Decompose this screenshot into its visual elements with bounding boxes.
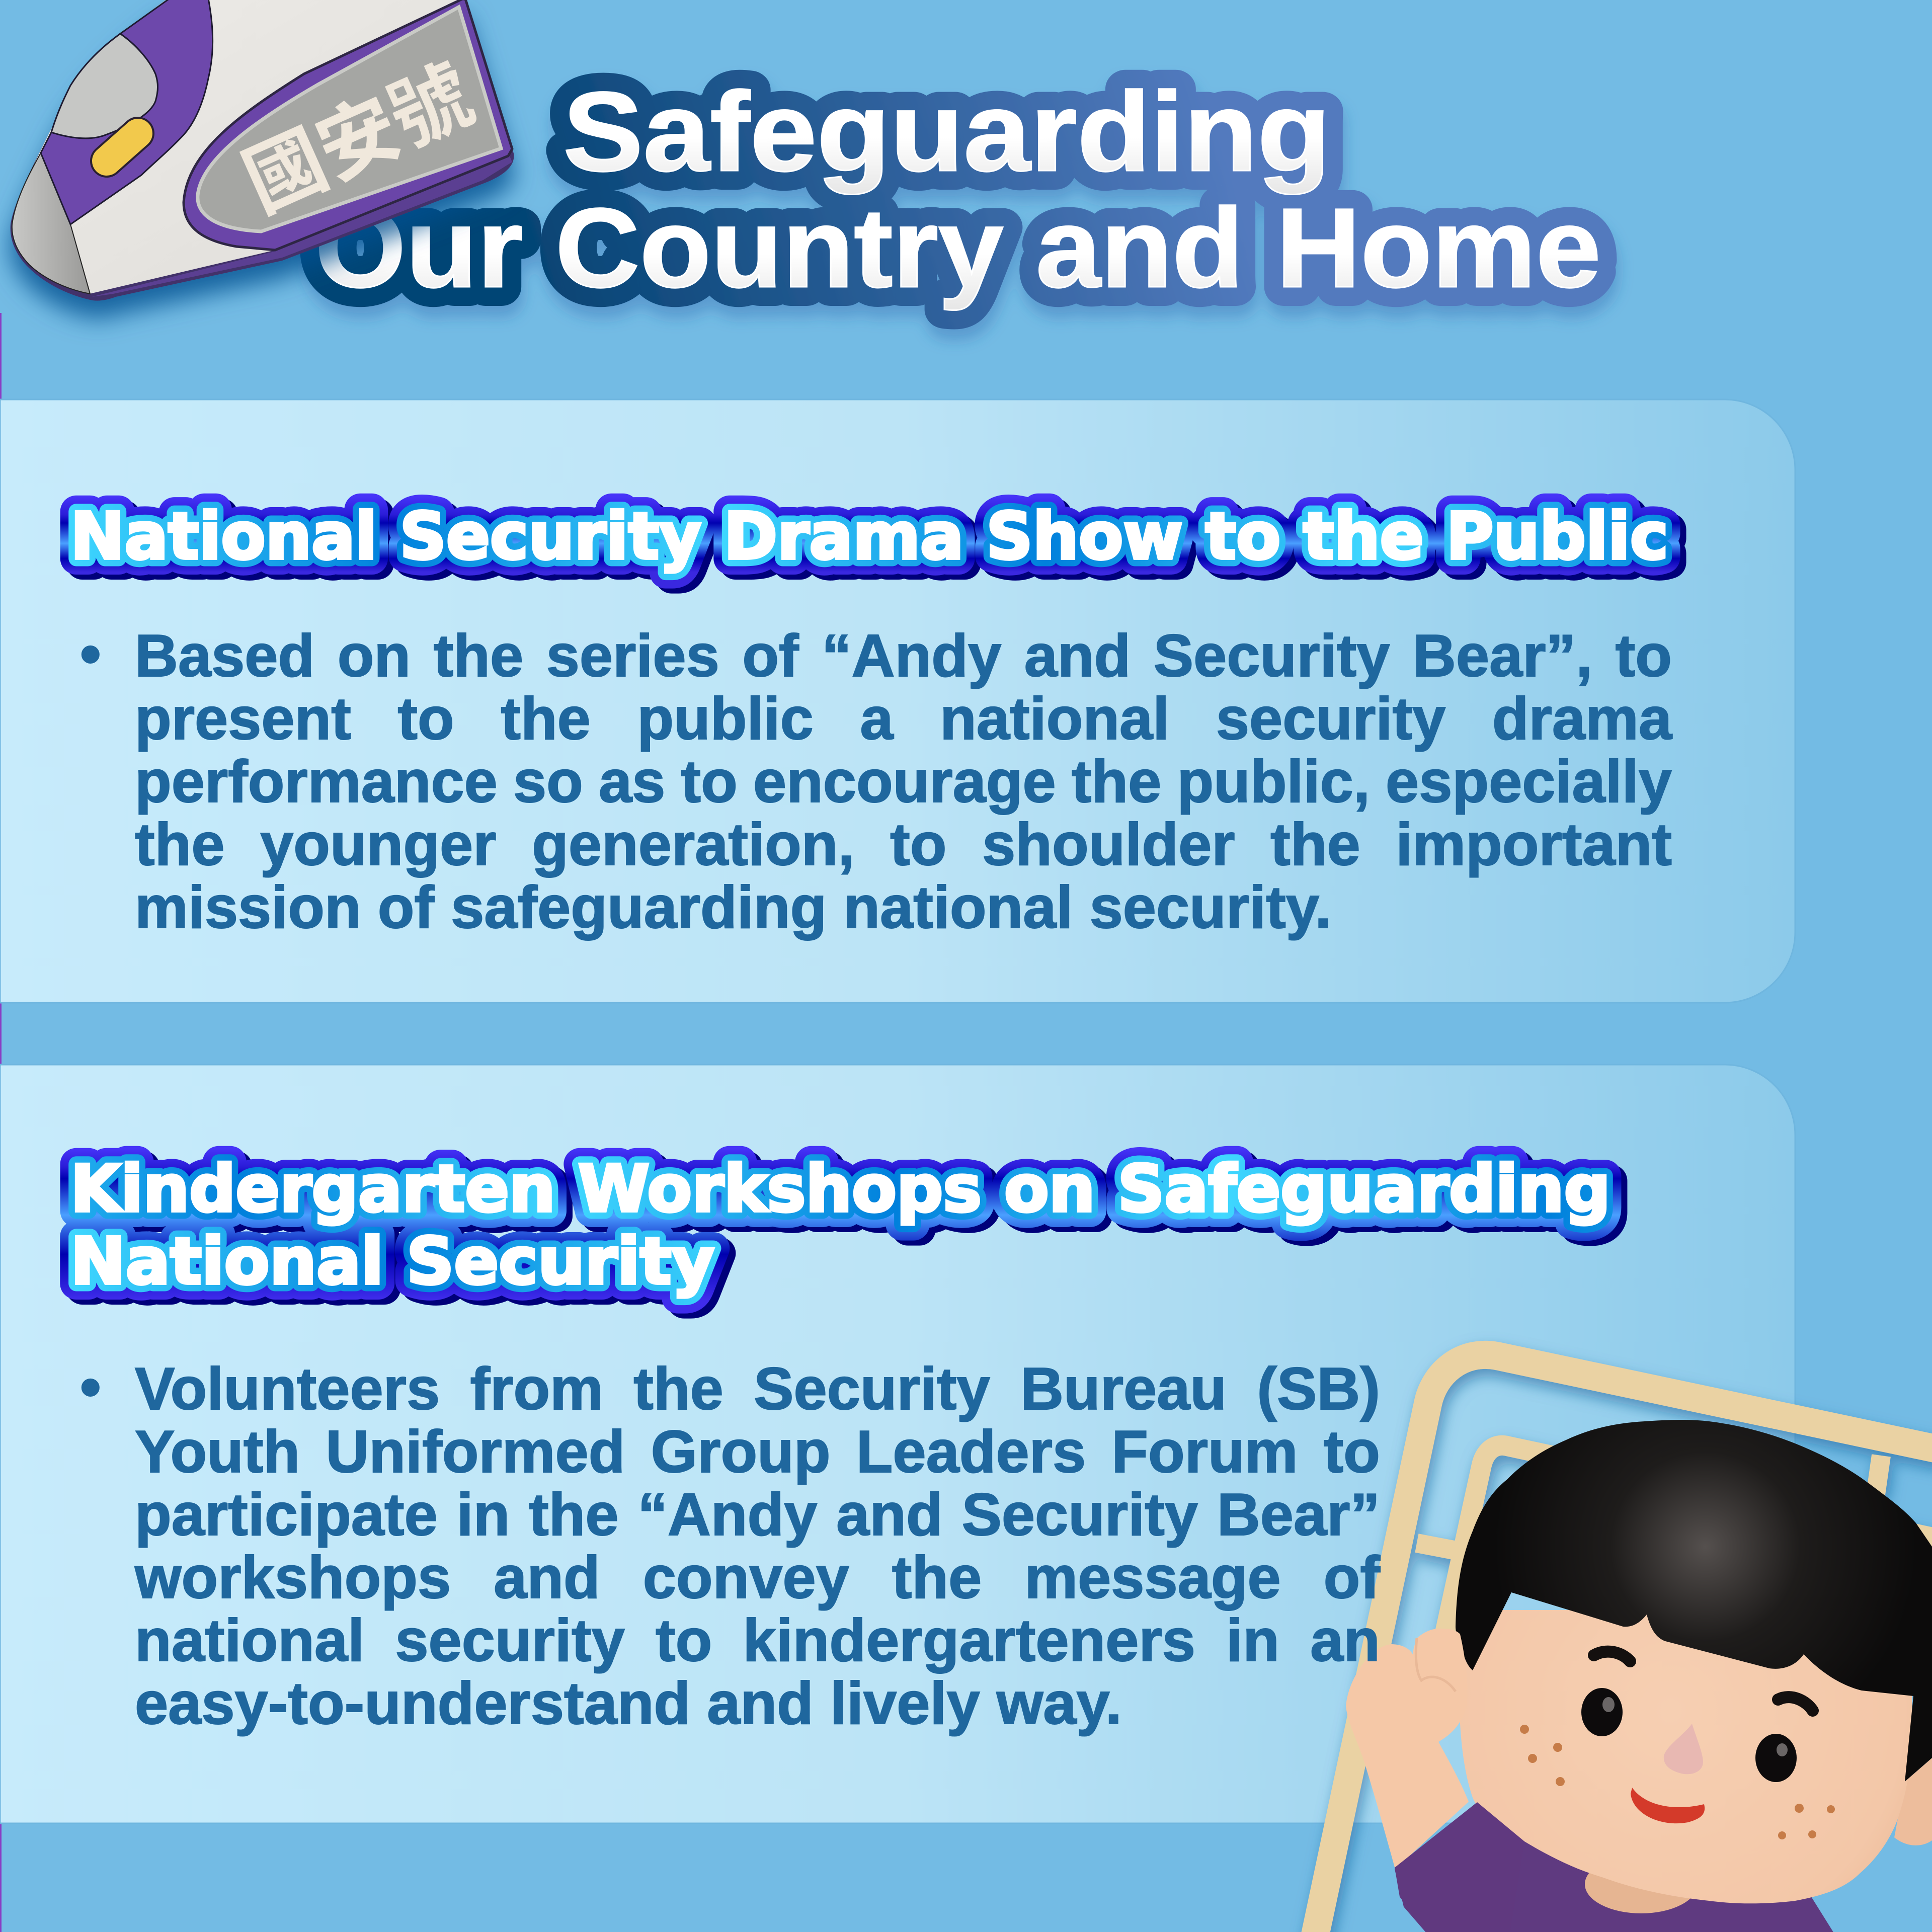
text block: kindergarten workshops description: Youth Uniformed Group Leaders Forum to: [135, 1418, 1380, 1485]
text block: drama show description: present to the public a national security drama: [135, 685, 1672, 752]
heading: National Security Drama Show to the Public: National Security Drama Show to the Public: [70, 499, 1668, 574]
heading: Kindergarten Workshops on Safeguarding National Security: National Security: [70, 1224, 714, 1299]
heading: Kindergarten Workshops on Safeguarding National Security: Kindergarten Workshops on Safeguarding: [70, 1152, 1611, 1227]
heading: Kindergarten Workshops on Safeguarding National Security: [70, 1152, 1617, 1304]
heading: Kindergarten Workshops on Safeguarding National Security: National Security: [70, 1224, 714, 1299]
title: Our Country and Home: [315, 185, 1601, 311]
heading: Kindergarten Workshops on Safeguarding National Security: National Security: [70, 1224, 714, 1299]
right eyebrow: [1778, 1697, 1813, 1711]
text block: drama show description: [80, 620, 1673, 941]
panel: kindergarten workshops: [0, 1065, 1795, 1823]
train side band: [184, 0, 512, 250]
title: Safeguarding: [563, 69, 1331, 195]
sleeve: [1395, 1802, 1524, 1932]
text block: kindergarten workshops description: workshops and convey the message of: [135, 1544, 1380, 1611]
text block: kindergarten workshops description: Volunteers from the Security Bureau (SB): [135, 1355, 1380, 1422]
head: [1459, 1610, 1913, 1903]
hair: [1456, 1420, 1932, 1782]
train windscreen: [51, 34, 158, 138]
heading: Kindergarten Workshops on Safeguarding National Security: National Security: [76, 1229, 720, 1304]
heading: Kindergarten Workshops on Safeguarding National Security: Kindergarten Workshops on Safeguarding: [70, 1152, 1611, 1227]
heading: Kindergarten Workshops on Safeguarding National Security: Kindergarten Workshops on Safeguarding: [76, 1157, 1617, 1232]
text block: drama show description: mission of safeguarding national security.: [135, 874, 1331, 941]
freckles: [1520, 1725, 1835, 1839]
heading: National Security Drama Show to the Public: National Security Drama Show to the Public: [70, 499, 1668, 574]
train emblem text: 國安號: [231, 50, 485, 228]
panel: drama show: [0, 399, 1795, 1003]
train nose: [12, 153, 90, 294]
finger crease: [1416, 1638, 1456, 1692]
frame: [1314, 1355, 1932, 1932]
neck: [1585, 1855, 1698, 1913]
right eye: [1755, 1734, 1797, 1782]
train lower stripe: [92, 155, 512, 297]
right ear: [1894, 1758, 1932, 1845]
left edge line: [0, 313, 2, 1932]
text block: kindergarten workshops description: participate in the “Andy and Security Bear”: [135, 1481, 1380, 1548]
train grey side panel: [198, 7, 501, 231]
left eyebrow: [1594, 1652, 1630, 1661]
heading: National Security Drama Show to the Public: National Security Drama Show to the Public: [76, 504, 1674, 579]
text block: drama show description: the younger generation, to shoulder the important: [135, 811, 1672, 878]
text block: kindergarten workshops description: national security to kindergarteners in an: [135, 1607, 1380, 1674]
train white body: [12, 0, 506, 294]
text block: kindergarten workshops description: [80, 1353, 1381, 1737]
mouth: [1631, 1788, 1705, 1823]
text block: drama show description: •: [80, 620, 101, 687]
text block: drama show description: performance so as to encourage the public, especially: [135, 748, 1672, 815]
title: Our Country and Home: [315, 185, 1601, 311]
train silhouette: [11, 0, 514, 301]
icon: national security train: [11, 0, 514, 301]
text block: drama show description: Based on the series of “Andy and Security Bear”, to: [135, 622, 1672, 689]
train purple front panel: [41, 0, 213, 224]
title: Safeguarding: [563, 69, 1331, 195]
text block: kindergarten workshops description: easy-to-understand and lively way.: [135, 1670, 1122, 1737]
left eye: [1581, 1688, 1623, 1736]
nose: [1664, 1724, 1703, 1774]
train headlight: [107, 133, 138, 161]
title: [315, 69, 1601, 311]
illustration: boy holding frame: [1314, 1355, 1932, 1932]
heading: Kindergarten Workshops on Safeguarding National Security: Kindergarten Workshops on Safeguarding: [70, 1152, 1611, 1227]
shirt: [1395, 1804, 1836, 1932]
hand and arm: [1346, 1629, 1469, 1869]
heading: National Security Drama Show to the Public: National Security Drama Show to the Public: [70, 499, 1668, 574]
text block: kindergarten workshops description: •: [80, 1353, 101, 1420]
